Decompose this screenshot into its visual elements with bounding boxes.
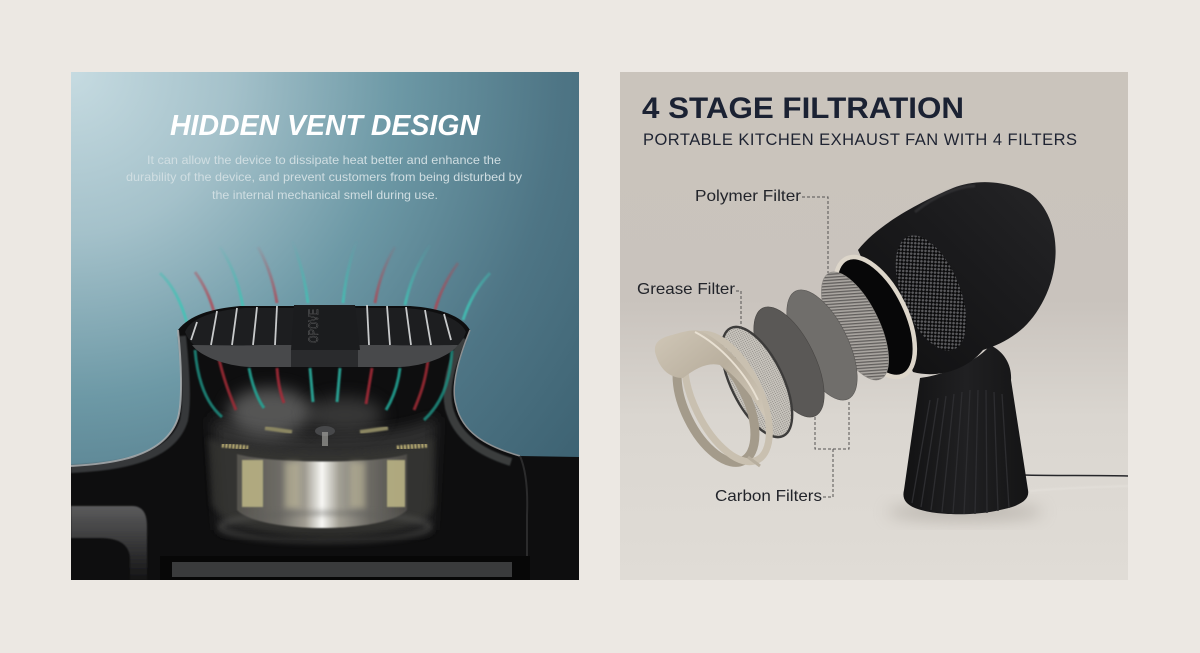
carbon filter disc 1 (754, 306, 824, 418)
leader lines (736, 197, 849, 497)
power cord (1026, 474, 1128, 477)
device body (71, 306, 579, 580)
description text: the internal mechanical smell during use. (212, 188, 438, 202)
subheading: PORTABLE KITCHEN EXHAUST FAN WITH 4 FILTERS (643, 131, 1077, 149)
heading: 4 stage filtration: 4 STAGE FILTRATION (642, 92, 964, 125)
lower device plate (160, 556, 530, 580)
fan mesh (896, 236, 966, 351)
panel background (620, 72, 1128, 580)
transparent interior mist (212, 388, 436, 530)
inner airflow arrows (195, 350, 452, 420)
panel background (71, 72, 579, 466)
description text (126, 153, 522, 202)
label: grease filter: Grease Filter (637, 281, 736, 298)
stand ribs (912, 390, 1009, 514)
description text: It can allow the device to dissipate heat better and enhance the (147, 153, 501, 167)
heading: hidden vent design: HIDDEN VENT DESIGN (170, 110, 481, 142)
fan stand (903, 345, 1028, 514)
fan top indent (915, 186, 975, 212)
label: carbon filters: Carbon Filters (715, 488, 822, 505)
motor (208, 426, 434, 541)
front ring cover (655, 330, 773, 468)
airflow arrows above the vent (160, 240, 490, 323)
carbon filter disc 2 (786, 290, 858, 400)
panel: 4 stage filtration (620, 72, 1128, 580)
base shadow (887, 503, 1043, 521)
device shoulder highlights (71, 330, 527, 580)
label: polymer filter: Polymer Filter (695, 188, 802, 205)
fan cylinder (858, 182, 1056, 374)
description text: durability of the device, and prevent customers from being disturbed by (126, 170, 522, 184)
polymer filter disc (821, 272, 889, 380)
panel: hidden vent design (71, 72, 579, 580)
lower left base shape (71, 506, 147, 580)
logo: OPOVE (305, 309, 321, 343)
polymer filter frame ring and cavity (834, 254, 918, 379)
vent lid with ribs and logo (185, 305, 466, 367)
grease filter disc (722, 326, 794, 438)
